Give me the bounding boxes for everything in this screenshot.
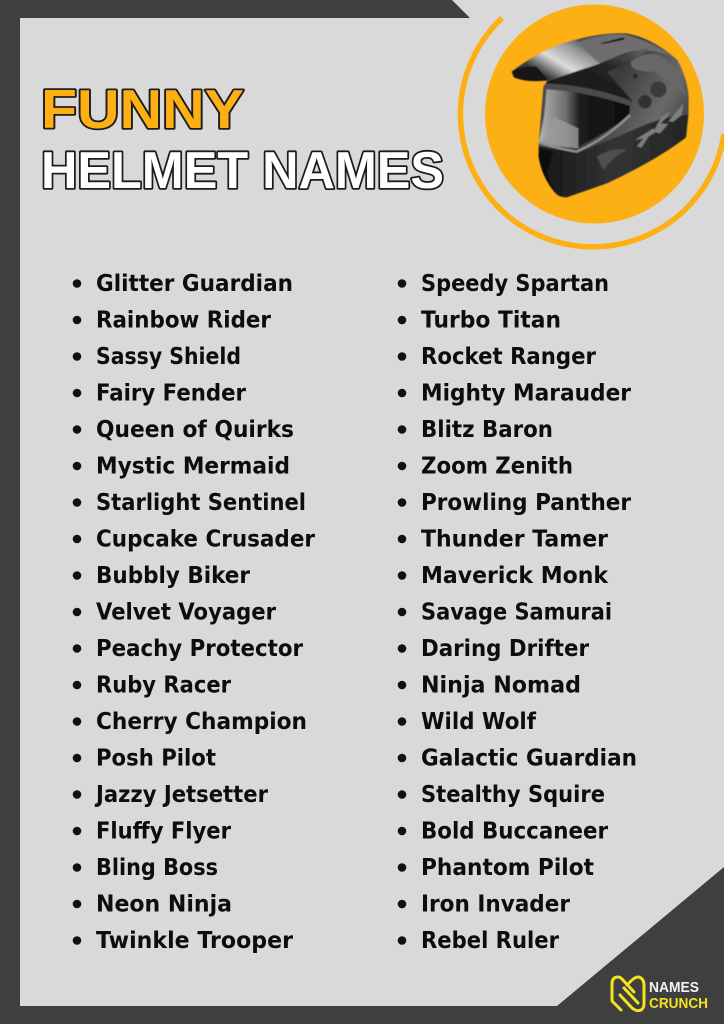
names right: Maverick Monk: [421, 563, 609, 589]
peak: [512, 39, 600, 81]
bullets left: [73, 279, 81, 945]
icon: motorcycle helmet: [512, 33, 689, 197]
names left: Starlight Sentinel: [96, 490, 306, 516]
lower side streaks: [597, 149, 627, 170]
names right: Zoom Zenith: [421, 454, 573, 480]
names right: Ninja Nomad: [421, 672, 581, 698]
names right: Rocket Ranger: [421, 344, 597, 370]
names left: Fluffy Flyer: [96, 818, 232, 844]
logo word names: NAMES: [649, 980, 699, 996]
yellow circle: [485, 4, 704, 224]
chin dark vent: [539, 150, 555, 193]
logo: names crunch: [612, 977, 708, 1012]
names left: Twinkle Trooper: [96, 928, 294, 954]
visor bottom rim: [539, 115, 630, 152]
decorative ring arc: [460, 18, 724, 247]
names right: Galactic Guardian: [421, 746, 637, 772]
names left: [94, 271, 316, 954]
helmet side sheen: [631, 54, 686, 97]
names left: Mystic Mermaid: [96, 454, 290, 480]
names right: Daring Drifter: [421, 636, 590, 662]
title line: helmet names: HELMET NAMES: [41, 142, 444, 200]
names right: Speedy Spartan: [421, 271, 609, 297]
names left: Rainbow Rider: [96, 308, 272, 334]
names right: Turbo Titan: [421, 308, 561, 334]
names right: Blitz Baron: [421, 417, 553, 443]
names left: Cupcake Crusader: [96, 526, 316, 552]
names right: Stealthy Squire: [421, 782, 605, 808]
names left: Neon Ninja: [96, 892, 232, 918]
bullets right: [398, 279, 406, 945]
list: left column: [73, 271, 316, 954]
names left: Fairy Fender: [96, 380, 247, 406]
crown vents: [600, 37, 625, 44]
names right: Mighty Marauder: [421, 380, 632, 406]
names left: Queen of Quirks: [96, 417, 294, 443]
names right: Thunder Tamer: [421, 526, 609, 552]
visor: [539, 89, 630, 148]
peak underside: [512, 66, 548, 81]
visor reflection: [540, 117, 578, 148]
names right: Prowling Panther: [421, 490, 632, 516]
names right: Bold Buccaneer: [421, 818, 609, 844]
logo mark: [612, 977, 644, 1011]
names left: Jazzy Jetsetter: [94, 782, 269, 808]
logo word crunch: CRUNCH: [649, 996, 708, 1012]
names left: Sassy Shield: [96, 344, 241, 370]
names right: Wild Wolf: [421, 709, 537, 735]
names right: [421, 271, 637, 954]
names left: Posh Pilot: [96, 746, 216, 772]
names right: Rebel Ruler: [421, 928, 560, 954]
visor top trim: [545, 83, 631, 106]
title line: funny: FUNNY: [41, 78, 244, 140]
helmet lower chin guard: [539, 115, 688, 197]
names left: Peachy Protector: [96, 636, 304, 662]
logo lettering on side: [635, 103, 683, 147]
names right: Iron Invader: [421, 892, 571, 918]
helmet side dark band: [547, 45, 653, 107]
names left: Bling Boss: [96, 855, 218, 881]
title: [41, 78, 444, 200]
names left: Bubbly Biker: [96, 563, 251, 589]
names right: Savage Samurai: [421, 600, 612, 626]
names left: Cherry Champion: [96, 709, 307, 735]
names left: Glitter Guardian: [96, 271, 293, 297]
list: right column: [398, 271, 637, 954]
names left: Velvet Voyager: [96, 600, 277, 626]
helmet shell: [539, 33, 689, 197]
helmet side plate: [633, 73, 666, 108]
names right: Phantom Pilot: [421, 855, 594, 881]
helmet top highlight: [572, 34, 673, 68]
names left: Ruby Racer: [96, 672, 232, 698]
